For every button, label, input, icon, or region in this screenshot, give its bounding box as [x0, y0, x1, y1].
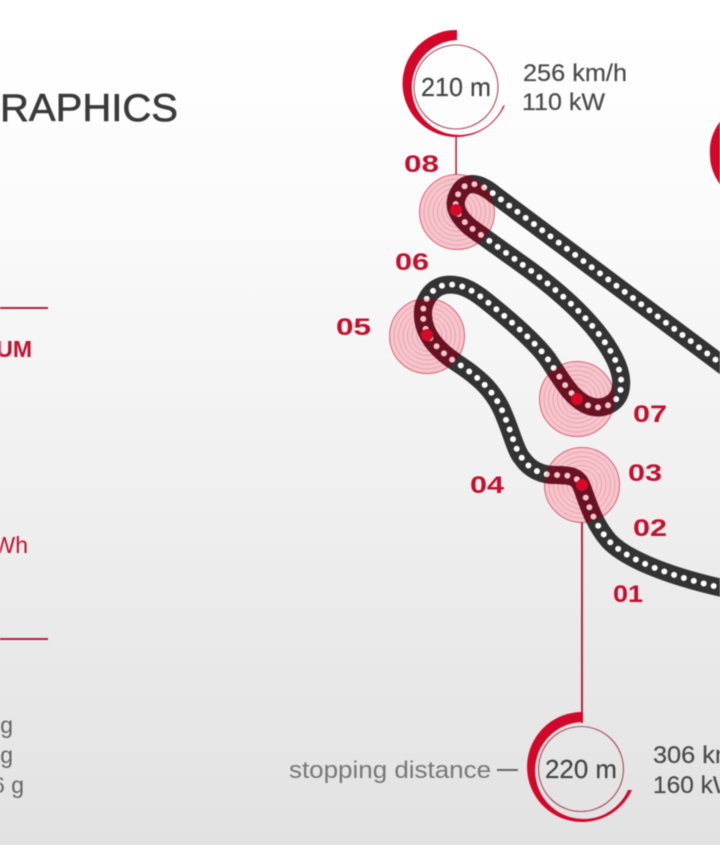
speed and power: corner 08 [522, 60, 627, 116]
track tint inside braking zones [413, 176, 615, 522]
track centre dots [423, 184, 720, 588]
corner number labels: 03 [628, 460, 662, 487]
corner number labels: 01 [613, 581, 643, 608]
track surface [423, 184, 720, 588]
corner number labels: 06 [395, 249, 429, 276]
braking zone discs [390, 174, 620, 522]
gauge: corner 08 stopping distance [403, 30, 505, 137]
speed and power: corner 08: 110 kW [522, 89, 605, 116]
speed and power: corner 08: 256 km/h [523, 60, 627, 87]
braking zone 08 [420, 174, 494, 250]
braking zone 03 [544, 448, 620, 522]
speed and power: corner 03 [653, 742, 720, 799]
braking zone 05 [390, 298, 464, 374]
corner number labels [336, 151, 667, 608]
gauge: corner 03 stopping distance [527, 712, 632, 822]
left panel: g-force values: g [0, 712, 13, 738]
gauge: corner 08 stopping distance: 210 m [421, 72, 491, 102]
braking point markers [421, 204, 588, 491]
title: RAPHICS [0, 87, 178, 130]
corner number labels: 08 [404, 151, 439, 178]
left panel: g-force values: g [0, 742, 13, 768]
gauge: corner 03 stopping distance: 220 m [545, 754, 617, 784]
corner number labels: 05 [336, 314, 371, 341]
gauge arc: partially visible at right edge [710, 119, 720, 187]
left panel: section rule top [0, 307, 48, 309]
corner number labels: 02 [633, 515, 667, 542]
stopping distance legend: stopping distance [289, 757, 491, 784]
left panel: section rule bottom [0, 638, 48, 640]
braking zone 07 [540, 362, 614, 436]
corner number labels: 07 [633, 401, 667, 428]
connector: top gauge to corner 08 [455, 136, 457, 212]
corner number labels: 04 [470, 472, 505, 499]
connector: bottom gauge to corner 03 [581, 485, 583, 723]
race track [423, 184, 720, 588]
left panel: g-force values [0, 712, 24, 798]
